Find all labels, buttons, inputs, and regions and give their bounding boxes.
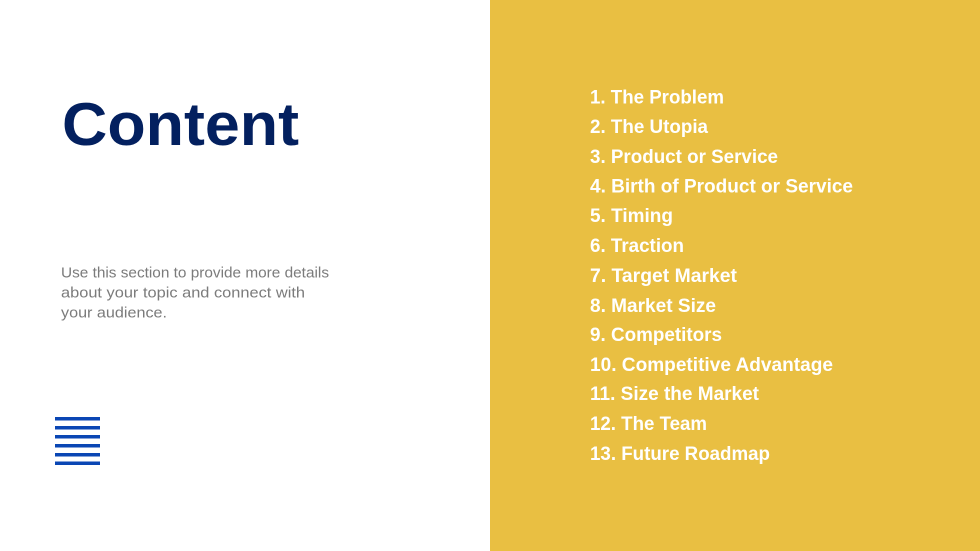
list: table of contents: 9. Competitors [590,325,722,346]
list: table of contents: 8. Market Size [590,296,716,317]
list: table of contents: 7. Target Market [590,266,738,287]
text block: description: Use this section to provide more details [61,264,329,281]
list: table of contents: 1. The Problem [590,87,724,108]
list: table of contents: 10. Competitive Advantage [590,355,833,376]
title: Content [62,91,299,158]
list: table of contents: 4. Birth of Product or Service [590,176,853,198]
list: table of contents: 13. Future Roadmap [590,444,770,465]
list: table of contents: 3. Product or Service [590,147,778,168]
list: table of contents: 5. Timing [590,206,673,227]
icon: stacked blue lines [55,417,100,465]
list: table of contents: 11. Size the Market [590,384,760,405]
list: table of contents: 12. The Team [590,414,707,435]
text block: description: your audience. [61,305,167,322]
list: table of contents [590,87,853,465]
text block: description [61,264,329,322]
list: table of contents: 6. Traction [590,236,684,257]
list: table of contents: 2. The Utopia [590,117,708,138]
panel: yellow background [490,0,980,551]
text block: description: about your topic and connect with [61,284,305,301]
